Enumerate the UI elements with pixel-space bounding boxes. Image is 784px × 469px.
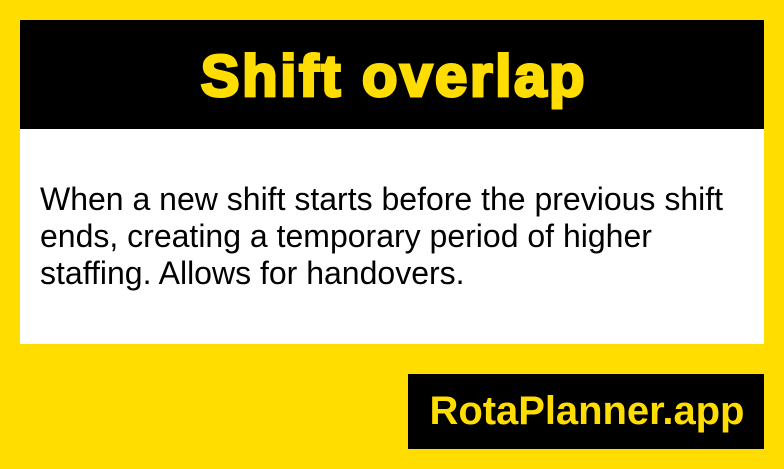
definition text: ends, creating a temporary period of higher — [40, 218, 652, 254]
definition text: staffing. Allows for handovers. — [40, 255, 465, 291]
definition panel — [20, 129, 764, 344]
brand badge — [408, 374, 764, 449]
definition text: When a new shift starts before the previous shift — [40, 181, 723, 217]
brand name: RotaPlanner.app — [430, 389, 744, 433]
title: Shift overlap — [201, 44, 587, 109]
definition text — [40, 181, 723, 291]
title banner — [20, 20, 764, 129]
